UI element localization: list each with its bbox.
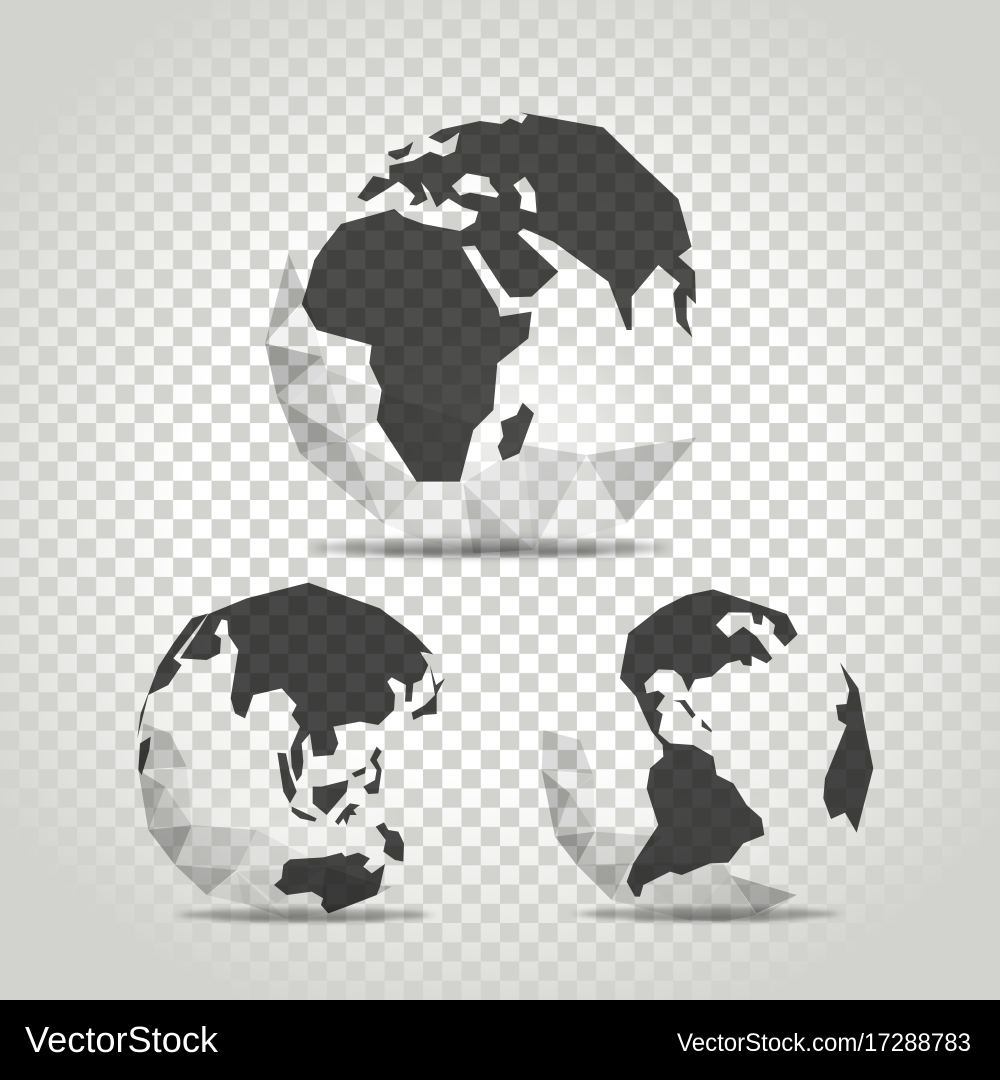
inner glow: top globe bbox=[340, 320, 680, 560]
fold shading on Australia bbox=[321, 867, 380, 913]
inner glow: right globe bbox=[570, 760, 810, 900]
land: Asia, Indonesia, Australia bbox=[137, 583, 445, 913]
shadow: left globe bbox=[180, 908, 430, 922]
shadow: top globe bbox=[314, 539, 664, 557]
land: North and South America, West Africa bbox=[620, 589, 873, 897]
inner glow: left globe bbox=[165, 760, 405, 900]
globe: Asia and Australia bbox=[137, 583, 445, 922]
globe: Americas bbox=[542, 589, 873, 922]
Africa edge bbox=[137, 613, 208, 738]
Borneo bbox=[313, 780, 348, 815]
low-poly shell: right globe bbox=[542, 730, 797, 922]
footer brand: VectorStock bbox=[25, 1019, 219, 1060]
British Isles bbox=[388, 142, 413, 160]
the Americas bbox=[620, 589, 798, 897]
Madagascar bbox=[498, 403, 534, 461]
Hispaniola bbox=[702, 719, 712, 732]
Cuba bbox=[673, 700, 696, 718]
low-poly shell: top globe bbox=[265, 253, 697, 553]
small island bbox=[352, 767, 366, 777]
low-poly shell: left globe bbox=[138, 723, 392, 918]
West Africa edge bbox=[823, 662, 873, 833]
Afro-Eurasia landmass bbox=[302, 112, 696, 482]
Philippines bbox=[363, 747, 382, 794]
fold shading on Africa bbox=[377, 393, 473, 482]
Asia bbox=[180, 583, 433, 782]
footer bar bbox=[0, 1000, 1000, 1080]
New Guinea bbox=[376, 822, 404, 862]
land: Europe, Africa, Asia bbox=[302, 112, 696, 482]
footer image id: VectorStock.com/17288783 bbox=[677, 1029, 971, 1057]
Java bbox=[292, 807, 317, 822]
left edge shading bbox=[302, 297, 317, 330]
shadow: right globe bbox=[577, 908, 837, 922]
globe: Africa and Eurasia bbox=[265, 112, 697, 560]
Madagascar bbox=[138, 737, 151, 775]
Japan bbox=[412, 665, 445, 720]
Australia bbox=[274, 853, 385, 913]
Sulawesi bbox=[335, 803, 360, 825]
Sumatra bbox=[277, 753, 297, 803]
